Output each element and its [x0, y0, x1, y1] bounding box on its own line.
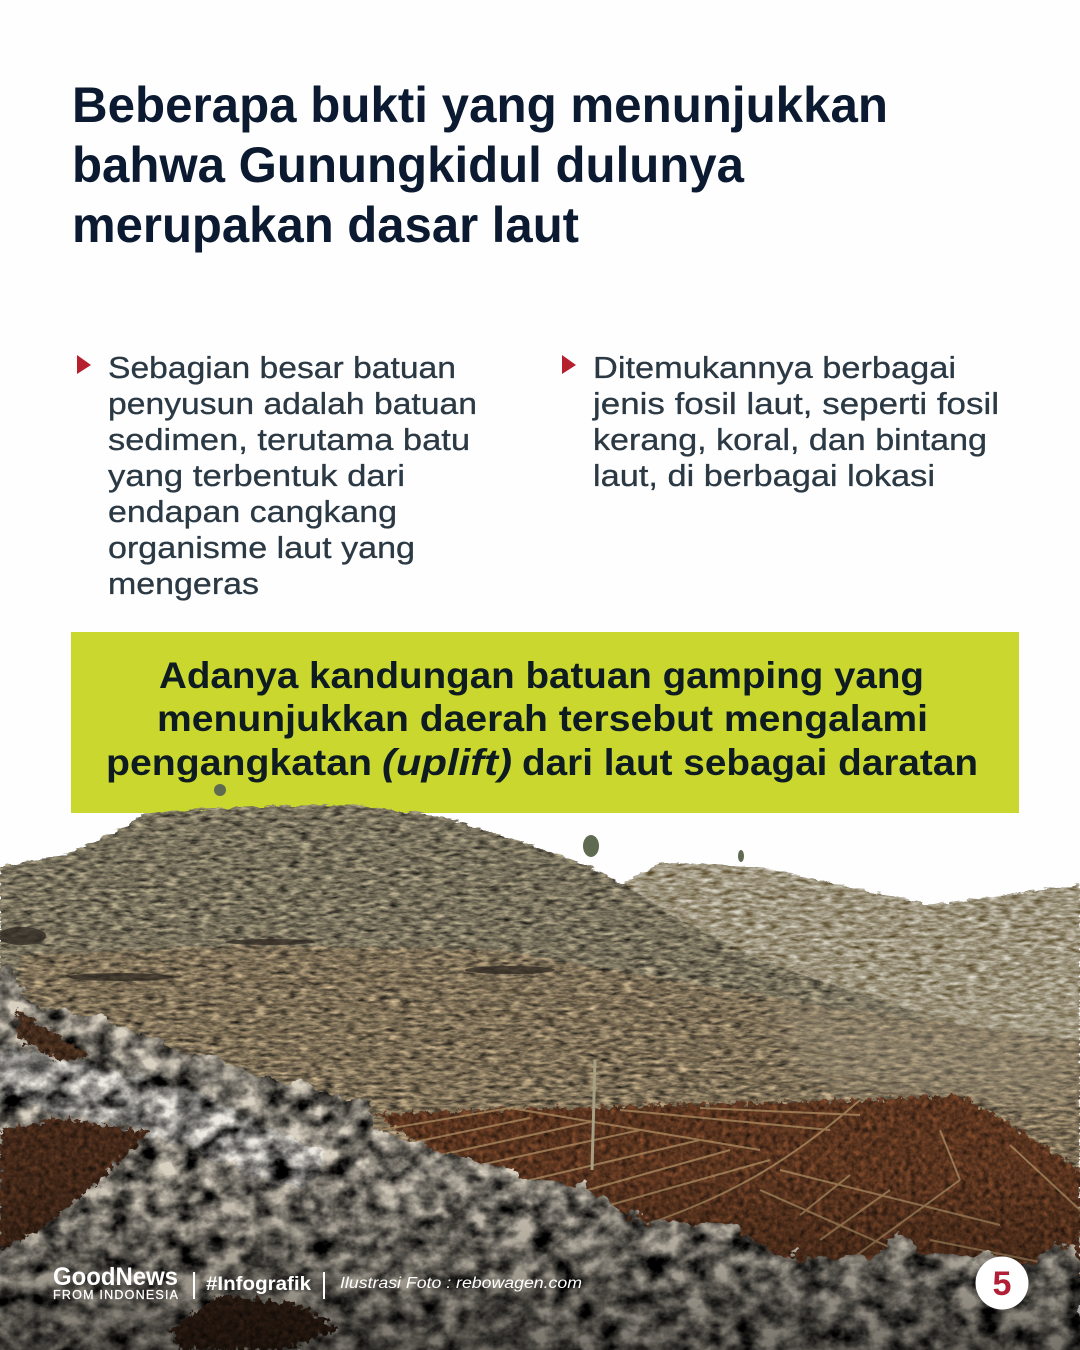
right bullet text: laut, di berbagai lokasi	[593, 458, 935, 493]
logo: GoodNews from Indonesia	[53, 1263, 179, 1302]
bullet point: left	[77, 350, 477, 601]
right bullet text	[592, 350, 999, 493]
thin sapling	[592, 1060, 595, 1170]
page number badge	[976, 1256, 1028, 1310]
callout text	[106, 655, 978, 783]
page number badge: 5	[993, 1265, 1011, 1303]
right bullet text: Ditemukannya berbagai	[593, 350, 956, 385]
bottom shading	[0, 1170, 1080, 1350]
callout text: (uplift)	[382, 742, 512, 783]
main hill	[0, 805, 1080, 1300]
left bullet text: organisme laut yang	[108, 530, 415, 565]
hashtag: #Infografik	[206, 1274, 311, 1295]
left bullet text: sedimen, terutama batu	[108, 422, 470, 457]
terrace contour lines	[90, 979, 960, 1100]
right bullet text: kerang, koral, dan bintang	[593, 422, 987, 457]
photo: karst hills with terraced fields	[0, 784, 1080, 1350]
left bullet text	[108, 350, 477, 601]
callout text: menunjukkan daerah tersebut mengalami	[157, 698, 928, 739]
bright rock band	[0, 1045, 330, 1190]
icon: red triangle bullet	[562, 355, 576, 374]
left bullet text: mengeras	[108, 566, 259, 601]
title: merupakan dasar laut	[72, 197, 579, 253]
back hills	[600, 862, 1080, 1300]
title: Beberapa bukti yang menunjukkan	[72, 77, 888, 133]
right slope lightening	[760, 1000, 1080, 1110]
dark ledges	[0, 927, 555, 981]
callout: lime highlight box	[71, 632, 1019, 813]
left bullet text: yang terbentuk dari	[108, 458, 405, 493]
callout text: Adanya kandungan batuan gamping yang	[159, 655, 924, 696]
callout text: pengangkatan	[106, 742, 372, 783]
title	[72, 77, 888, 253]
logo: GoodNews from Indonesia: GoodNews	[53, 1263, 178, 1291]
left bullet text: Sebagian besar batuan	[108, 350, 456, 385]
right bullet text: jenis fosil laut, seperti fosil	[592, 386, 999, 421]
footer	[53, 1263, 582, 1302]
icon: grass sprigs on the hilltop	[214, 784, 744, 862]
icon: red triangle bullet	[77, 355, 91, 374]
red-brown field	[375, 1095, 1080, 1300]
bullet point: right	[562, 350, 999, 493]
foreground limestone rocks	[0, 973, 1080, 1350]
left bullet text: penyusun adalah batuan	[108, 386, 477, 421]
callout text: dari laut sebagai daratan	[522, 742, 978, 783]
brown soil on the left	[0, 1008, 340, 1350]
photo credit: Ilustrasi Foto : rebowagen.com	[340, 1275, 582, 1292]
title: bahwa Gunungkidul dulunya	[72, 137, 745, 193]
lower terraced slope	[20, 945, 1080, 1300]
left bullet text: endapan cangkang	[108, 494, 397, 529]
logo: GoodNews from Indonesia: FROM INDONESIA	[53, 1288, 179, 1302]
